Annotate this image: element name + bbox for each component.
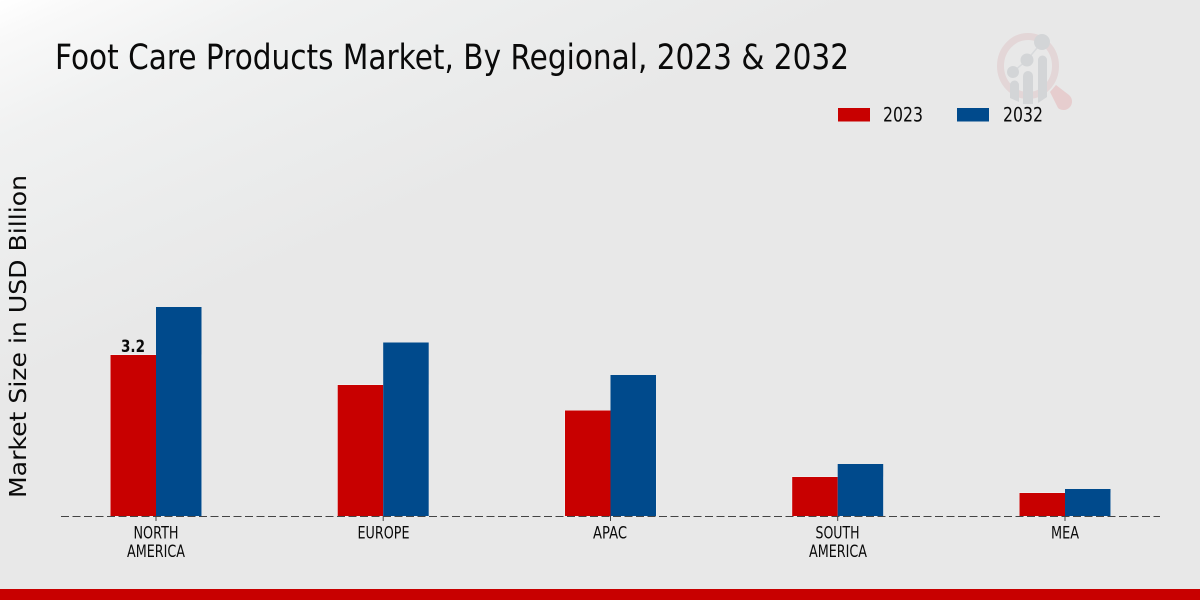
bars: Europe — [337, 342, 429, 516]
bars: North America — [110, 307, 202, 516]
legend: 2023 — [838, 104, 923, 126]
bars: South America — [792, 464, 884, 516]
x label: Europe: EUROPE — [358, 524, 410, 542]
legend: 2032 — [957, 104, 1043, 126]
x label: MEA: MEA — [1051, 524, 1080, 542]
bars: MEA — [1019, 489, 1111, 516]
x label: North America — [127, 524, 186, 561]
x label: South America: AMERICA — [809, 542, 868, 561]
bars: APAC — [564, 375, 656, 516]
x label: South America: SOUTH — [816, 524, 860, 542]
x label: North America: NORTH — [134, 524, 178, 542]
data label: 3.2: 3.2 — [121, 337, 145, 356]
x label: APAC: APAC — [593, 524, 627, 542]
legend: 2023: 2023 — [883, 104, 923, 126]
legend: 2032: 2032 — [1003, 104, 1043, 126]
title: Foot Care Products Market, By Regional, 2023 & 2032 — [55, 38, 849, 78]
x label: South America — [809, 524, 868, 561]
x label: North America: AMERICA — [127, 542, 186, 561]
y axis label: Market Size in USD Billion — [6, 175, 32, 498]
legend — [838, 104, 1043, 126]
bar chart — [61, 307, 1160, 561]
footer bar — [0, 589, 1200, 600]
icon: watermark logo — [1000, 34, 1072, 110]
x axis baseline — [61, 516, 1160, 518]
